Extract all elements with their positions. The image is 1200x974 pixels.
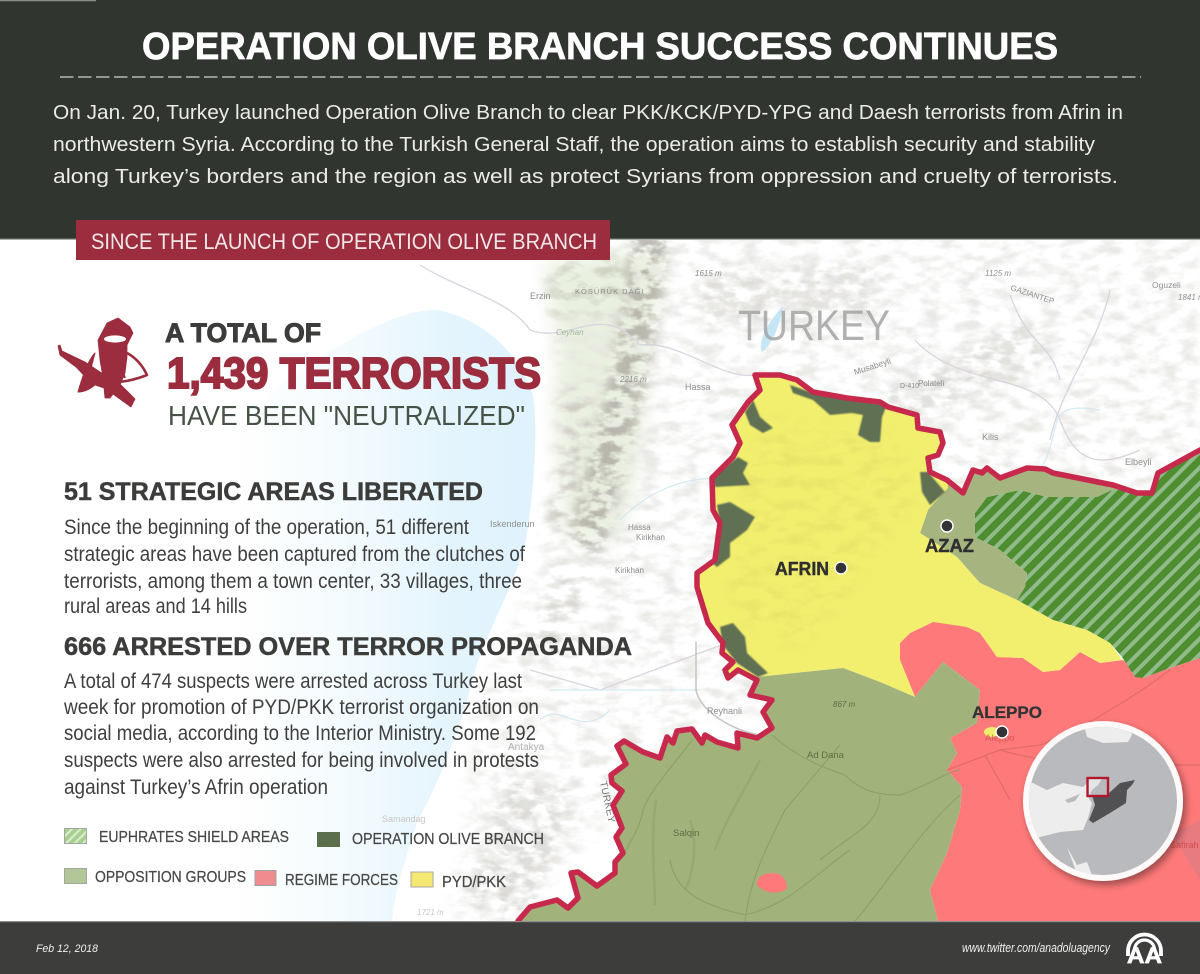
section: strategic areas: Since the beginning of the operation, 51 different: [64, 516, 469, 539]
map place labels: GAZIANTEP: [1009, 283, 1055, 306]
section: arrests: week for promotion of PYD/PKK terrorist organization on: [63, 696, 539, 719]
faint regime label: Safirah: [1170, 840, 1199, 850]
zone: opposition around Azaz: [920, 468, 1117, 600]
section: strategic areas: 51 STRATEGIC AREAS LIBERATED: [64, 478, 483, 506]
Cyprus: [1065, 794, 1080, 803]
lake: [761, 306, 783, 352]
inset locator map: [1020, 720, 1183, 881]
section: arrests: A total of 474 suspects were arrested across Turkey last: [64, 670, 522, 693]
map place labels: 2216 m: [619, 375, 647, 384]
zone labels on map: Salqin: [673, 828, 699, 839]
map place labels: Antakya: [508, 742, 545, 753]
map place labels: D-410: [900, 383, 919, 390]
city: Azaz: [925, 520, 974, 556]
map place labels: Hassa: [685, 382, 711, 392]
legend: Operation Olive Branch: OPERATION OLIVE BRANCH: [352, 831, 544, 848]
map place labels: Musabeyli: [853, 356, 892, 377]
intro text: [53, 101, 1123, 188]
banner: [76, 220, 610, 260]
twitter handle: www.twitter.com/anadoluagency: [962, 941, 1111, 955]
headline stat: [165, 318, 541, 431]
legend: PYD/PKK: PYD/PKK: [442, 874, 506, 891]
zone labels on map: Ad Dana: [807, 750, 845, 761]
intro text: along Turkey’s borders and the region as well as protect Syrians from oppression and cruelty of terrorists.: [53, 165, 1118, 188]
city: Afrin: AFRIN: [775, 559, 829, 579]
section: arrests: 666 ARRESTED OVER TERROR PROPAGANDA: [64, 633, 632, 661]
map place labels: Ceyhan: [556, 328, 584, 337]
darker patch in regime zone: [1172, 820, 1200, 880]
map place labels: Iskenderun: [490, 519, 535, 529]
zone: opposition south: [518, 662, 980, 921]
Afrin zone highlight: [1088, 779, 1102, 796]
map place labels: 1125 m: [985, 269, 1011, 278]
icon: masked militant with rifle: [58, 318, 147, 407]
header band: [0, 0, 1200, 240]
map place labels: Kirikhan: [615, 566, 644, 575]
section: arrests: social media, according to the Interior Ministry. Some 192: [64, 722, 536, 745]
operation olive branch patches: [712, 385, 945, 677]
roads on zones: [620, 735, 960, 921]
intro text: On Jan. 20, Turkey launched Operation Olive Branch to clear PKK/KCK/PYD-YPG and Daesh terrorists from Afrin in: [53, 101, 1123, 124]
section: arrests: against Turkey’s Afrin operation: [64, 776, 328, 799]
zone: PYD/PKK Afrin: [697, 375, 1122, 697]
roads and rivers: [420, 265, 1140, 690]
map place labels: Oguzeli: [1152, 280, 1181, 290]
general terrain texture: [450, 230, 1200, 921]
city: Aleppo: [972, 703, 1042, 744]
section: strategic areas: [64, 478, 525, 618]
zone labels on map: 867 m: [833, 700, 856, 709]
legend: [64, 828, 544, 891]
map place labels: 1721 m: [417, 908, 444, 917]
section: strategic areas: strategic areas have been captured from the clutches of: [64, 543, 525, 566]
Black Sea: [1085, 727, 1132, 743]
footer band: [0, 921, 1200, 974]
section: strategic areas: rural areas and 14 hills: [64, 595, 247, 618]
headline stat: 1,439 TERRORISTS: [167, 349, 541, 398]
Red Sea: [1067, 848, 1092, 874]
icon: AA logo: [1127, 934, 1162, 968]
map place labels: Erzin: [530, 291, 551, 301]
legend: regime forces: [255, 870, 398, 889]
map place labels: 1615 m: [695, 269, 722, 278]
map place labels: Polateli: [918, 379, 944, 388]
date: Feb 12, 2018: [36, 943, 99, 955]
map: control zones: [518, 375, 1200, 921]
section: arrests: [63, 633, 632, 799]
map place labels: Reyhanli: [707, 706, 742, 716]
city: Aleppo: ALEPPO: [972, 703, 1042, 722]
map place labels: Samandag: [382, 814, 426, 824]
Mediterranean: [1029, 783, 1092, 838]
map place labels: Hassa: [628, 523, 651, 532]
icon: AA logo: AA: [1127, 943, 1162, 968]
map place labels: Kirikhan: [636, 533, 665, 542]
country label: Turkey: TURKEY: [738, 302, 890, 350]
green uplands: [545, 250, 670, 540]
legend: Euphrates Shield areas: EUPHRATES SHIELD AREAS: [99, 829, 289, 846]
section: strategic areas: terrorists, among them a town center, 33 villages, three: [64, 570, 522, 593]
mountain ridges: [490, 230, 1040, 915]
border line: [518, 375, 1200, 921]
legend: regime forces: REGIME FORCES: [285, 872, 398, 889]
sea: [230, 310, 535, 921]
zone labels on map: [673, 700, 856, 839]
map place labels: [382, 269, 1200, 917]
map place labels: KÖSÜRÜK DAĞI: [575, 287, 645, 296]
city: Aleppo: Aleppo: [985, 733, 1015, 744]
headline stat: HAVE BEEN "NEUTRALIZED": [168, 400, 525, 431]
zone: regime forces: [900, 622, 1200, 921]
intro text: northwestern Syria. According to the Turkish General Staff, the operation aims to establish security and stability: [53, 133, 1096, 156]
title: OPERATION OLIVE BRANCH SUCCESS CONTINUES: [142, 26, 1058, 68]
city: Azaz: AZAZ: [925, 536, 974, 556]
section: arrests: suspects were also arrested for being involved in protests: [64, 749, 539, 772]
headline stat: A TOTAL OF: [165, 318, 321, 348]
map background: [0, 230, 1200, 922]
map place labels: TURKEY: [597, 780, 617, 824]
map place labels: Elbeyli: [1125, 457, 1152, 467]
legend: PYD/PKK: [411, 872, 506, 891]
regime pocket: [757, 873, 787, 893]
map place labels: Kilis: [982, 432, 999, 442]
banner: SINCE THE LAUNCH OF OPERATION OLIVE BRANCH: [91, 229, 597, 254]
zone: Euphrates Shield hatch: [975, 450, 1200, 678]
Syria: [1089, 780, 1135, 823]
yellow relief shading: [725, 415, 915, 650]
legend: opposition groups: OPPOSITION GROUPS: [95, 869, 246, 886]
